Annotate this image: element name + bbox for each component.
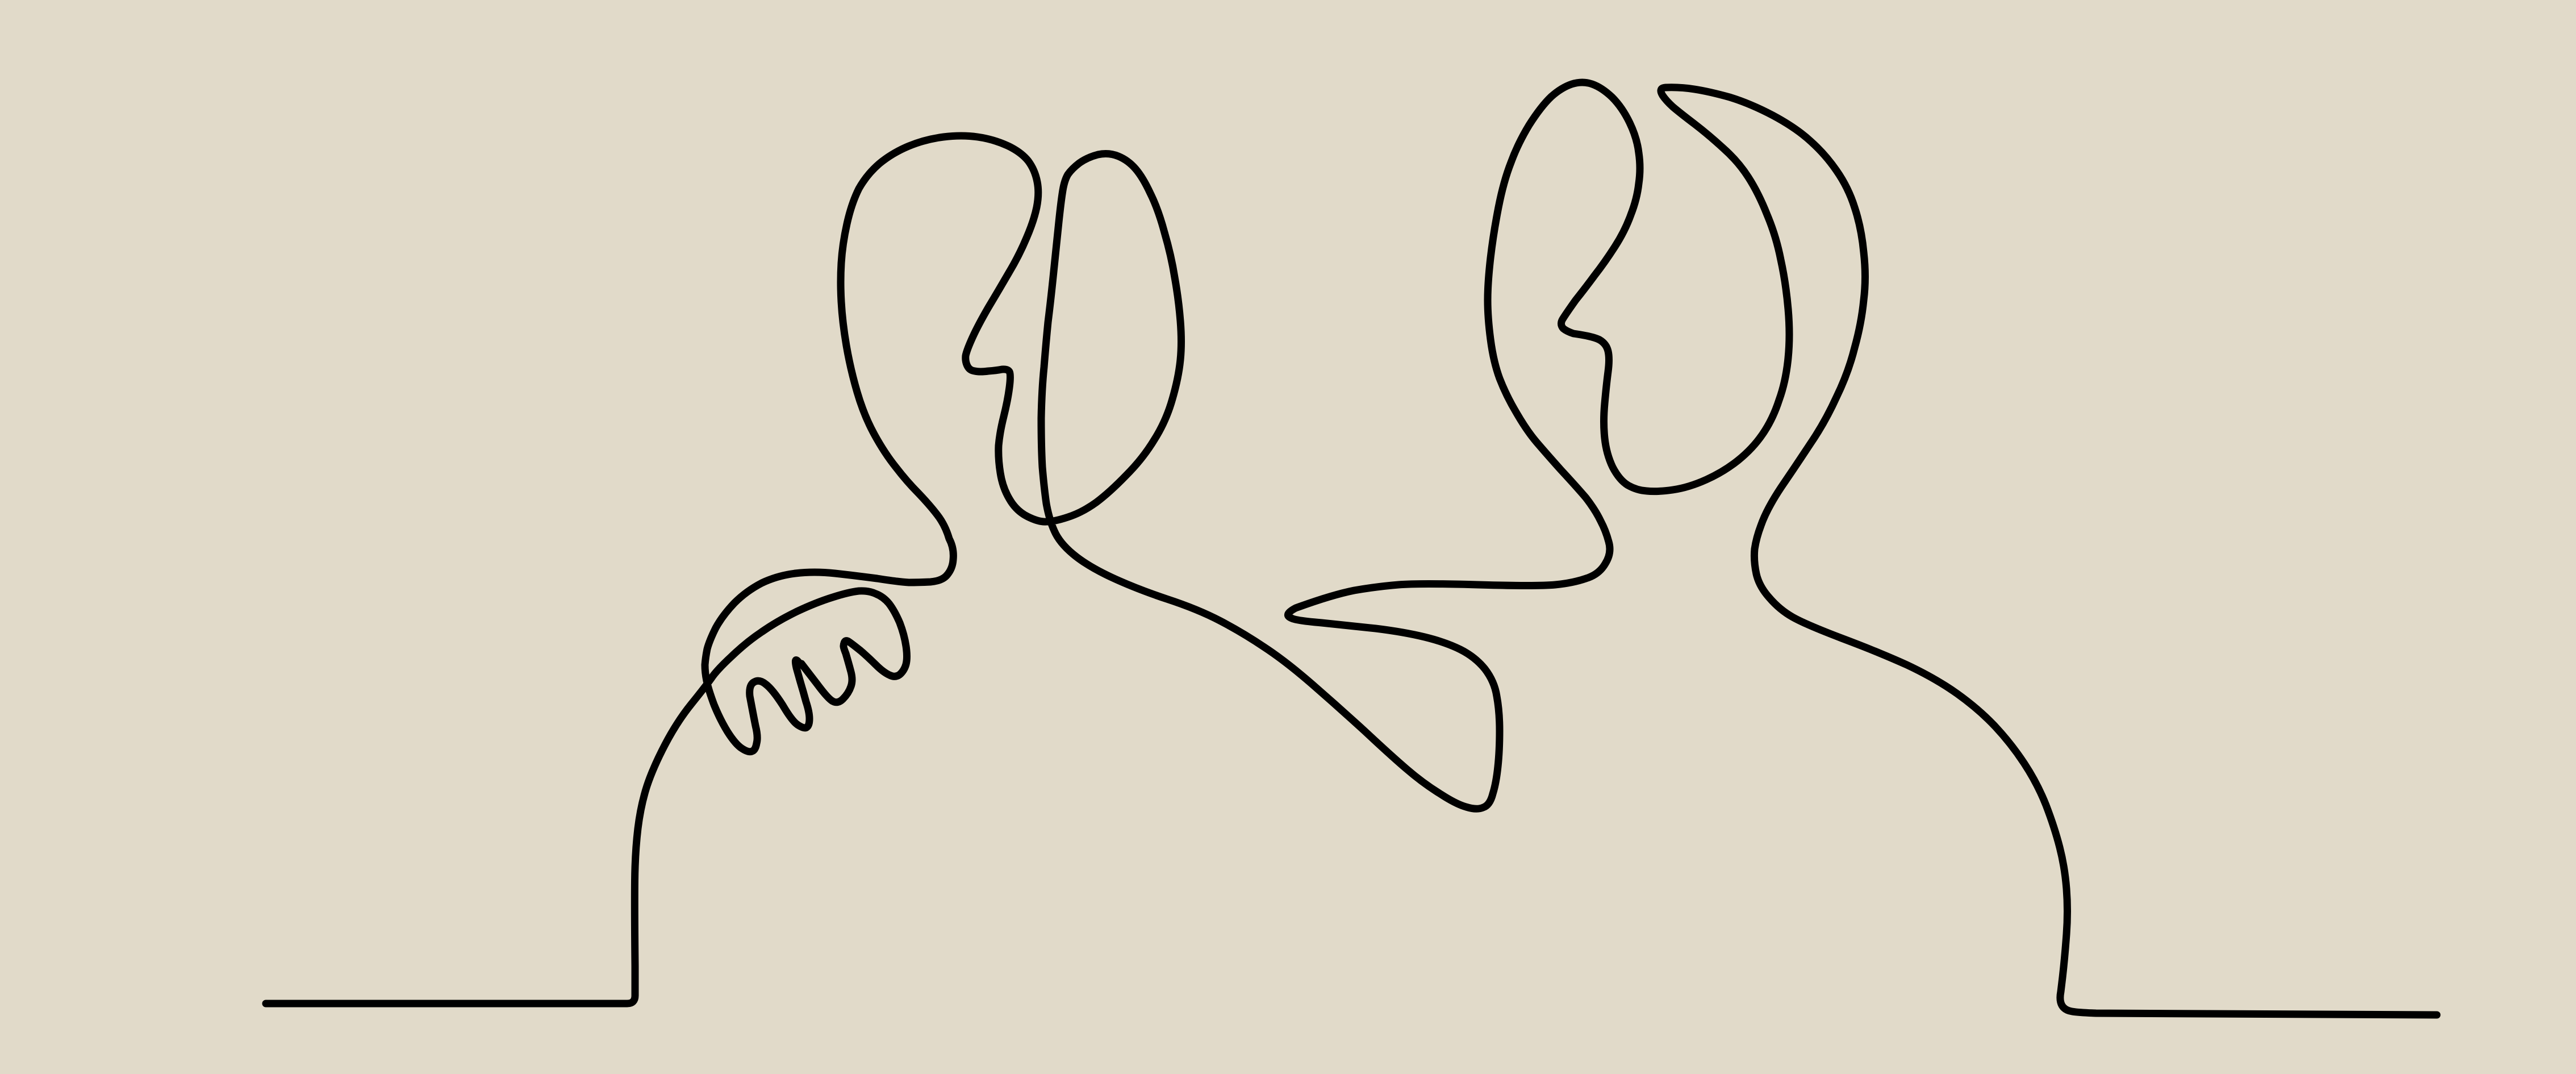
continuous line: ground, left figure with hand, right figure, ground — [266, 82, 2437, 1015]
